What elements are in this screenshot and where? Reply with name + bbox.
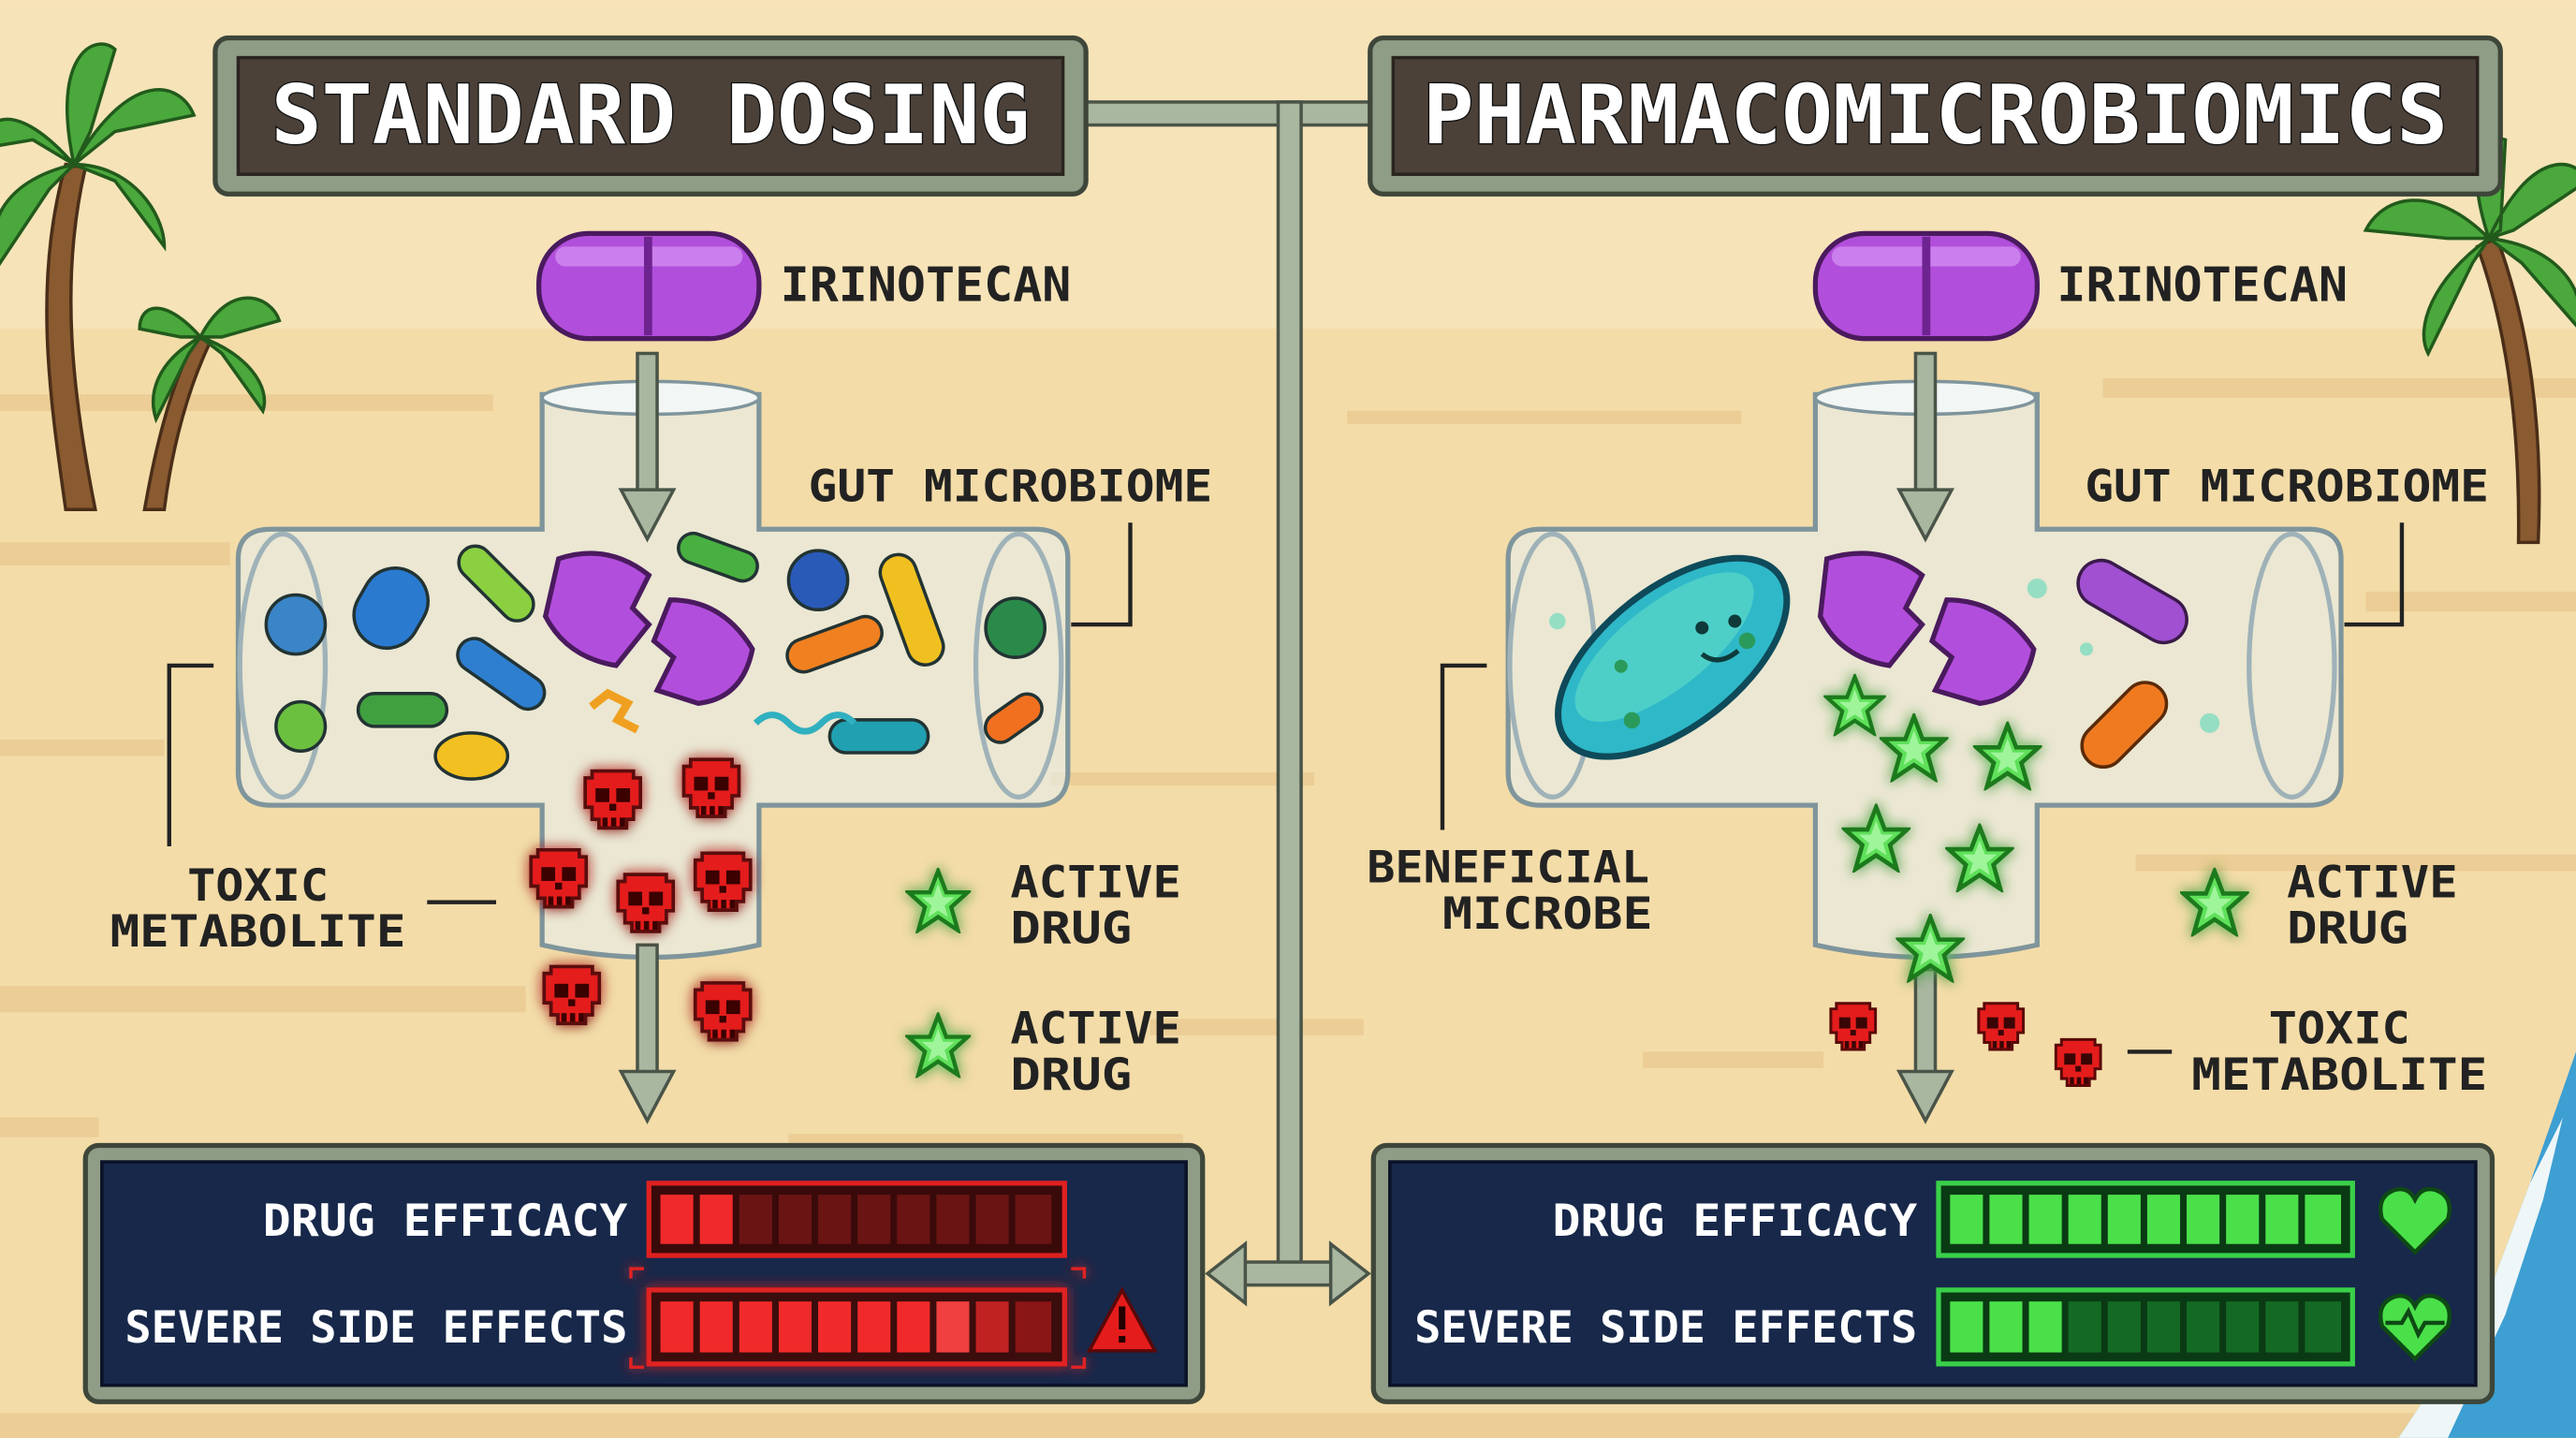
right pill: irinotecan (1815, 233, 2348, 339)
bar: side effects low (1939, 1290, 2352, 1364)
label: beneficial microbe: BENEFICIAL (1367, 843, 1649, 894)
label: toxic metabolite right (2128, 1004, 2487, 1101)
connector between panels (1084, 102, 1372, 1303)
panel: standard dosing outcomes (85, 1145, 1203, 1401)
active drug stars (right) (1826, 677, 2039, 979)
broken pill (546, 553, 649, 666)
right gut tube (1508, 381, 2341, 957)
label: beneficial microbe: MICROBE (1442, 888, 1653, 940)
label: toxic metabolite right: METABOLITE (2191, 1049, 2487, 1101)
label: toxic metabolite left (110, 666, 496, 958)
beneficial microbe (1524, 520, 1821, 795)
ocean (2398, 1051, 2576, 1438)
legend: active drug (right): DRUG (2287, 903, 2408, 955)
title: standard dosing (215, 38, 1086, 194)
title: standard dosing: STANDARD DOSING (271, 67, 1030, 163)
bar: efficacy low (649, 1183, 1064, 1255)
panel: standard dosing outcomes: DRUG EFFICACY (263, 1196, 628, 1247)
title: pharmacomicrobiomics: PHARMACOMICROBIOMICS (1423, 67, 2448, 163)
palm tree right (2365, 139, 2576, 542)
right pill: irinotecan: IRINOTECAN (2056, 257, 2348, 313)
label: toxic metabolite left: TOXIC (187, 860, 329, 912)
panel: pharmacomicrobiomics outcomes (1373, 1145, 2492, 1401)
label: toxic metabolite right: TOXIC (2269, 1004, 2410, 1055)
left pill: irinotecan: IRINOTECAN (781, 257, 1071, 313)
legend: active drug (right) (2184, 857, 2458, 955)
panel: standard dosing outcomes: SEVERE SIDE EFFECTS (124, 1302, 627, 1354)
legend: active drug (left 1): ACTIVE (1010, 857, 1181, 908)
label: gut microbiome right (2085, 461, 2489, 624)
left pill: irinotecan (539, 233, 1071, 339)
broken pill (1821, 553, 1922, 666)
legend: active drug (left 1) (909, 857, 1181, 955)
title: pharmacomicrobiomics (1370, 38, 2500, 194)
legend: active drug (left 2): ACTIVE (1010, 1004, 1181, 1055)
left arrows (621, 353, 674, 1121)
right arrows (1899, 353, 1952, 1121)
legend: active drug (right): ACTIVE (2287, 857, 2458, 908)
toxic metabolites (right, few) (1831, 1004, 2100, 1086)
label: gut microbiome right: GUT MICROBIOME (2085, 461, 2489, 512)
label: gut microbiome left (809, 461, 1212, 624)
bar: efficacy high (1939, 1183, 2352, 1255)
bar: side effects high (631, 1269, 1084, 1367)
small microbes (2070, 552, 2195, 651)
legend: active drug (left 2) (909, 1004, 1181, 1101)
left gut tube (238, 381, 1068, 957)
toxic metabolites (left) (531, 759, 751, 1040)
panel: pharmacomicrobiomics outcomes: SEVERE SIDE EFFECTS (1414, 1302, 1917, 1354)
icon: heart with pulse (2380, 1296, 2450, 1359)
icon: warning (1090, 1290, 1155, 1351)
label: toxic metabolite left: METABOLITE (110, 906, 406, 958)
panel: pharmacomicrobiomics outcomes: DRUG EFFICACY (1553, 1196, 1918, 1247)
microbes (266, 529, 1047, 779)
label: gut microbiome left: GUT MICROBIOME (809, 461, 1212, 512)
legend: active drug (left 2): DRUG (1010, 1049, 1132, 1101)
icon: heart (2380, 1189, 2450, 1253)
legend: active drug (left 1): DRUG (1010, 903, 1132, 955)
label: beneficial microbe (1367, 666, 1653, 940)
palm tree left (0, 44, 279, 509)
